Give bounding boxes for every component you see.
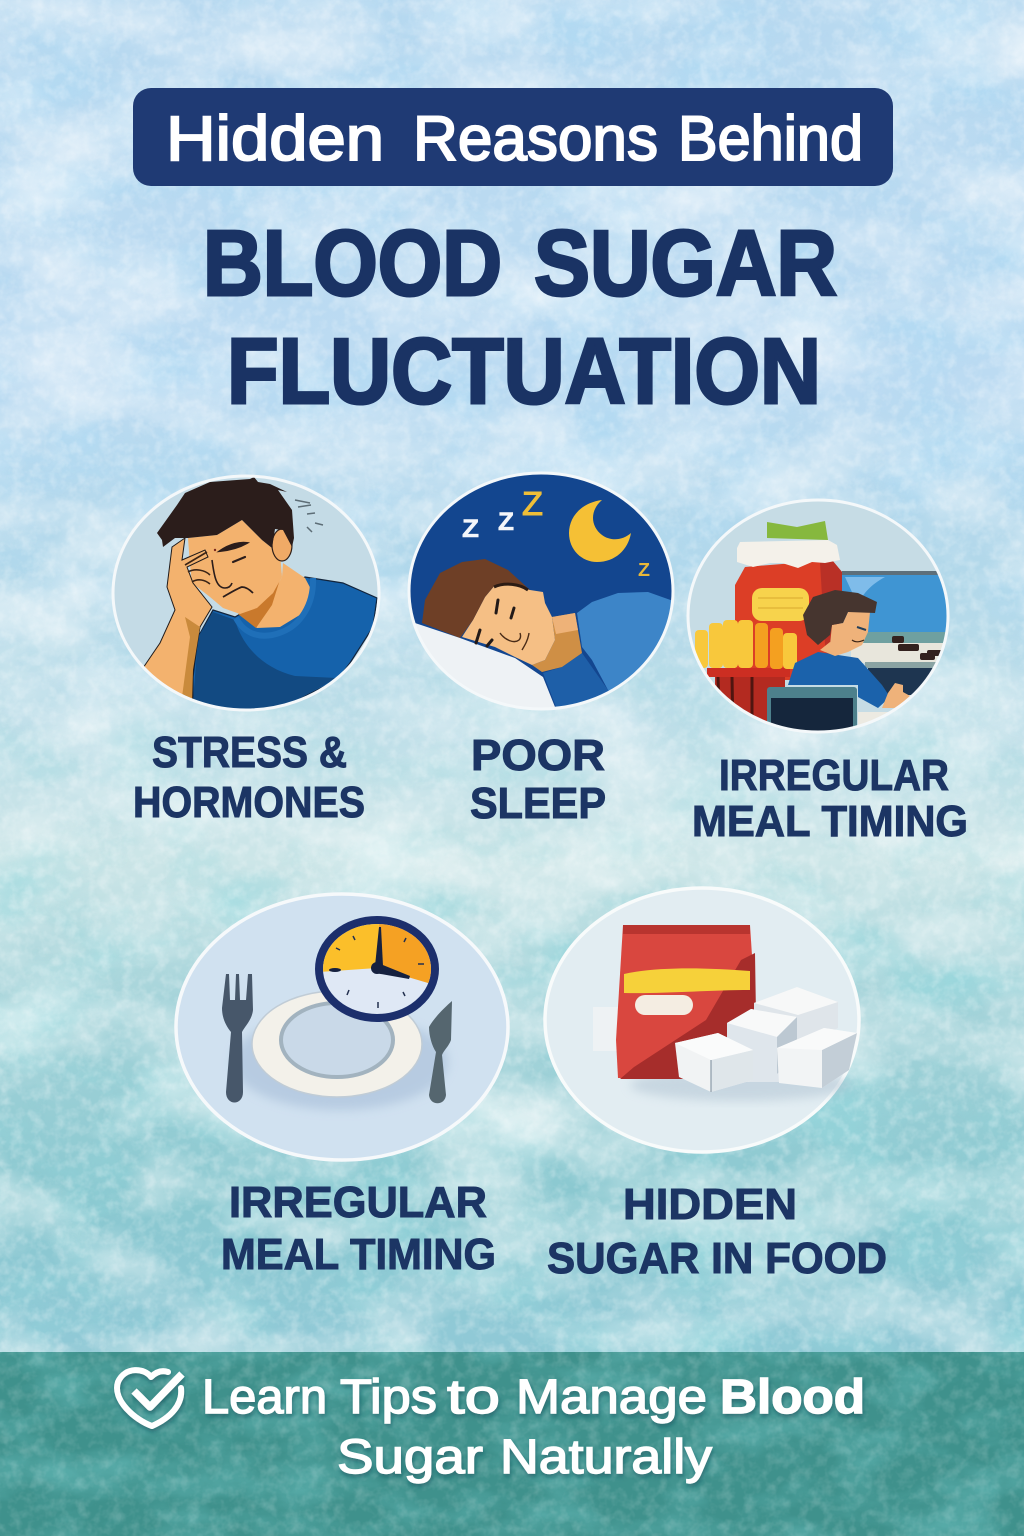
main heading: FLUCTUATION bbox=[227, 319, 821, 423]
icon: plate and clock bbox=[176, 894, 508, 1160]
label: stress and hormones bbox=[133, 728, 365, 827]
footer text: Learn bbox=[202, 1371, 327, 1424]
label: poor sleep: POOR bbox=[471, 731, 605, 780]
label: hidden sugar in food bbox=[547, 1180, 887, 1283]
label: irregular meal timing second: MEAL TIMING bbox=[221, 1230, 496, 1279]
main heading: SUGAR bbox=[534, 211, 837, 315]
icon: sugar bag and cubes bbox=[545, 888, 859, 1152]
label: hidden sugar in food: HIDDEN bbox=[623, 1180, 797, 1229]
icon: sleeping man: Z bbox=[638, 560, 650, 580]
main heading: BLOOD bbox=[203, 211, 502, 315]
footer text bbox=[202, 1371, 865, 1484]
icon: sleeping man: Z bbox=[498, 508, 514, 536]
footer text: Sugar bbox=[337, 1431, 483, 1484]
label: poor sleep: SLEEP bbox=[470, 779, 606, 828]
label: stress and hormones: STRESS & bbox=[152, 728, 347, 777]
label: irregular meal timing: MEAL TIMING bbox=[692, 797, 968, 846]
title banner: Hidden bbox=[166, 104, 384, 174]
title banner: Reasons bbox=[413, 104, 658, 174]
icon: sleeping man bbox=[409, 473, 690, 725]
icon: stressed man bbox=[113, 476, 379, 712]
icon: snacks at desk bbox=[688, 500, 953, 738]
main heading bbox=[203, 211, 837, 423]
sugar bag bbox=[616, 925, 757, 1079]
label: poor sleep bbox=[470, 731, 606, 828]
label: irregular meal timing: IRREGULAR bbox=[719, 751, 949, 800]
label: irregular meal timing bbox=[692, 751, 968, 846]
footer text: Tips bbox=[340, 1371, 437, 1424]
footer text: Manage bbox=[516, 1371, 707, 1424]
title banner bbox=[133, 88, 893, 186]
title banner: Behind bbox=[678, 104, 863, 174]
knife bbox=[429, 1001, 452, 1103]
fork bbox=[222, 974, 253, 1102]
sugar cubes bbox=[675, 987, 857, 1092]
icon: sleeping man: Z bbox=[462, 515, 479, 543]
icon: sleeping man: Z bbox=[522, 485, 543, 522]
footer text: Blood bbox=[720, 1371, 865, 1424]
footer band bbox=[0, 1352, 1024, 1536]
label: irregular meal timing second: IRREGULAR bbox=[229, 1178, 487, 1227]
label: irregular meal timing second bbox=[221, 1178, 496, 1279]
footer text: Naturally bbox=[500, 1431, 712, 1484]
footer text: to bbox=[447, 1371, 500, 1424]
icon: check mark bbox=[117, 1370, 182, 1426]
label: stress and hormones: HORMONES bbox=[133, 778, 365, 827]
label: hidden sugar in food: SUGAR IN FOOD bbox=[547, 1234, 887, 1283]
clock bbox=[315, 916, 439, 1022]
plate bbox=[252, 991, 422, 1097]
